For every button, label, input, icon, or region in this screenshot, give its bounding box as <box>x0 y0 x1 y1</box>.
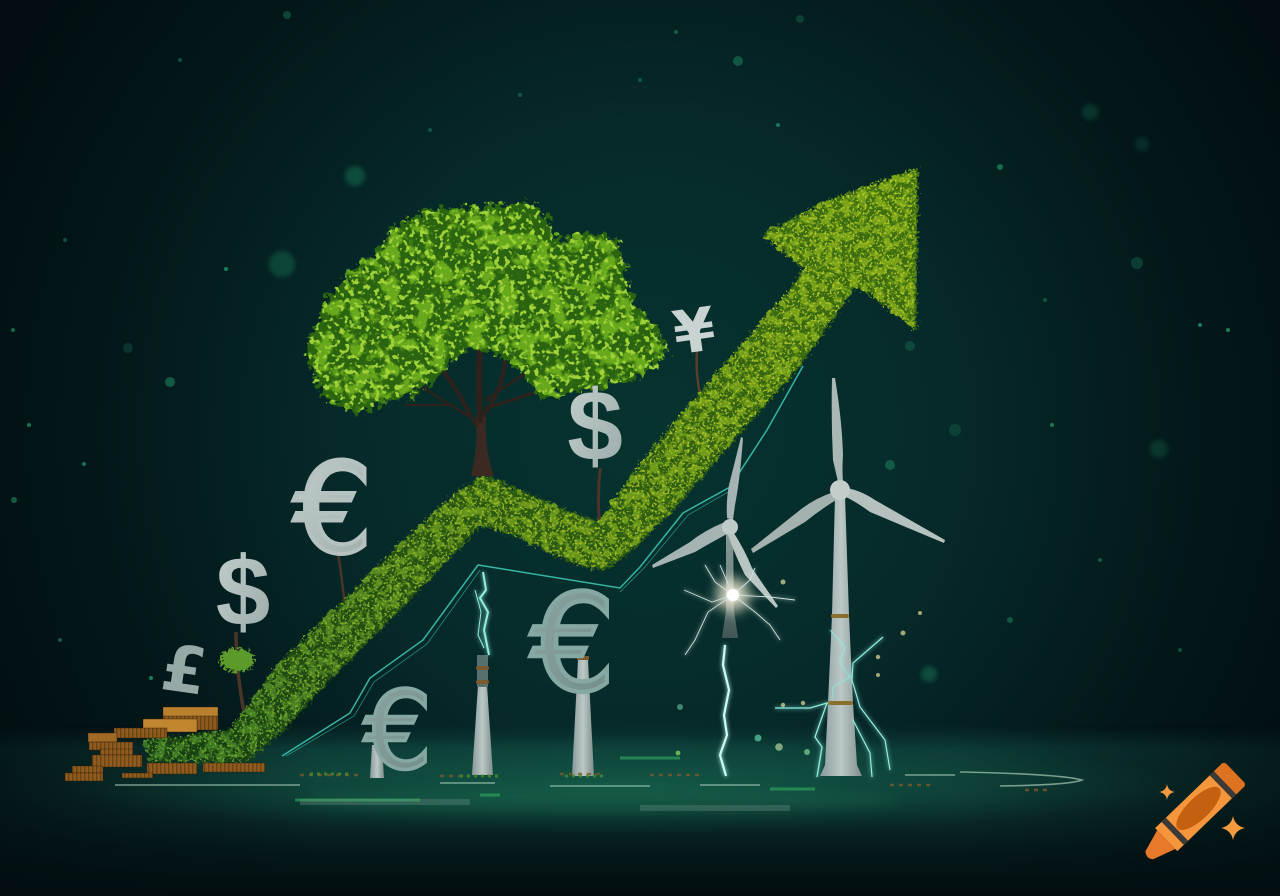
coin stacks <box>65 707 265 781</box>
moss light layer <box>145 168 918 762</box>
sparkle small <box>1159 784 1175 800</box>
floating green particles <box>11 11 1230 682</box>
crayon body <box>1137 761 1246 869</box>
dollar symbol left: $ <box>216 536 270 646</box>
pound symbol: £ <box>157 631 211 711</box>
lightning bolts <box>475 572 890 777</box>
ground floor <box>0 725 1280 896</box>
stem: dollar left <box>236 632 244 712</box>
small euro pole <box>370 745 384 778</box>
small sapling <box>220 648 254 672</box>
warm sparks near turbines <box>676 580 922 755</box>
tree canopy <box>307 203 666 411</box>
euro symbol upper: € <box>293 437 373 582</box>
ground lines and debris <box>115 758 1082 812</box>
wind turbine small <box>652 437 778 638</box>
yen symbol: ¥ <box>669 294 720 369</box>
arrow: moss growth line <box>145 168 918 762</box>
stem: yen <box>697 350 703 405</box>
stem: dollar middle <box>598 468 600 530</box>
moss base layer <box>145 168 918 762</box>
stem: euro <box>338 552 345 606</box>
canopy shadow layer <box>307 203 666 411</box>
crayon logo <box>1137 761 1246 869</box>
sparkle large <box>1221 816 1245 840</box>
wind turbine large <box>751 378 945 776</box>
euro symbol small: € <box>364 669 432 794</box>
electric spark <box>684 565 795 655</box>
tree trunk and branches <box>335 345 585 476</box>
moss mid layer <box>145 168 918 762</box>
canopy highlight leaves <box>307 203 666 411</box>
chimney pole right <box>572 656 594 776</box>
circuit line <box>282 366 803 756</box>
dollar symbol middle: $ <box>567 370 623 482</box>
canopy mid leaves <box>307 203 666 411</box>
chimney pole left <box>472 655 493 775</box>
euro symbol large: € <box>530 566 616 722</box>
